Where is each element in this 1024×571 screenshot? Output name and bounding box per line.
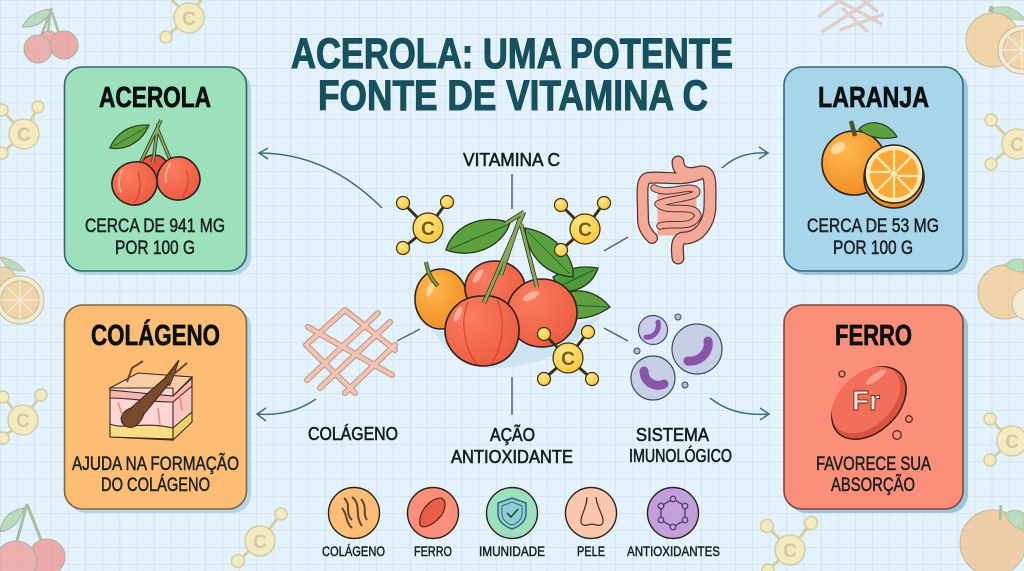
panel: acerola <box>64 67 251 275</box>
icon: acerola cherries <box>110 120 200 205</box>
text: acerola amount <box>85 216 225 259</box>
text: colágeno description: AJUDA NA FORMAÇÃO <box>72 453 239 475</box>
central illustration: acerolas <box>415 212 610 368</box>
label: ação antioxidante: AÇÃO <box>490 424 535 445</box>
orange fruit <box>415 269 467 329</box>
faded cherries top left <box>22 8 78 63</box>
arrow: to acerola <box>259 148 382 208</box>
icon: molecule bottom <box>538 326 598 386</box>
icon: molecule left: C <box>421 219 435 240</box>
faded molecule right <box>985 114 1024 170</box>
legend: pele <box>566 488 616 559</box>
icon: immune cells <box>631 314 722 400</box>
heading: colágeno: COLÁGENO <box>91 318 220 352</box>
panel: laranja <box>784 67 968 275</box>
right fruit <box>507 279 577 347</box>
leaves <box>446 219 610 319</box>
title: ACEROLA: UMA POTENTE <box>291 30 733 78</box>
legend: ferro: FERRO <box>414 543 452 559</box>
faded orange bottom right <box>960 505 1024 571</box>
faded molecule left <box>0 101 44 159</box>
text: colágeno description <box>72 453 239 496</box>
faded molecule left lower <box>0 389 47 444</box>
panel: ferro <box>784 305 968 513</box>
legend: colágeno <box>322 488 385 559</box>
icon: intestine <box>642 162 710 258</box>
icon: molecule left <box>396 196 454 254</box>
arrow: to ferro <box>710 398 769 420</box>
text: laranja amount <box>807 216 939 259</box>
icon: molecule bottom: C <box>561 349 575 370</box>
legend: imunidade: IMUNIDADE <box>479 543 545 559</box>
label: sistema imunológico <box>629 425 732 466</box>
text: acerola amount: CERCA DE 941 MG <box>85 216 225 237</box>
faded molecule left lower: C <box>16 411 30 432</box>
text: ferro description: ABSORÇÃO <box>831 474 915 496</box>
label: ação antioxidante <box>451 424 573 467</box>
label: ação antioxidante: ANTIOXIDANTE <box>451 447 573 467</box>
faded molecule bottom <box>232 508 287 568</box>
faded molecule top <box>160 0 204 43</box>
text: ferro description <box>816 454 931 496</box>
back fruit <box>465 261 525 315</box>
text: acerola amount: POR 100 G <box>115 238 195 259</box>
right leaf <box>525 228 573 277</box>
faded molecule bottom: C <box>253 532 267 553</box>
faded molecule bottom right <box>760 516 818 571</box>
icon: orange <box>822 121 924 208</box>
faded orange right <box>978 259 1024 320</box>
label: vitamina c: VITAMINA C <box>463 150 560 170</box>
legend: pele: PELE <box>577 543 605 559</box>
faded collagen top right <box>818 0 884 32</box>
faded molecule top: C <box>182 9 196 30</box>
text: laranja amount: CERCA DE 53 MG <box>807 216 939 237</box>
faded molecule right: C <box>1010 135 1024 156</box>
title <box>291 30 733 120</box>
arrow: to colágeno <box>257 399 316 421</box>
faded orange slice left <box>0 257 44 324</box>
faded molecule bottom right: C <box>783 541 797 562</box>
faded orange top right <box>966 6 1024 74</box>
legend: antioxidantes <box>627 488 720 559</box>
label: sistema imunológico: IMUNOLÓGICO <box>629 445 732 466</box>
text: ferro description: FAVORECE SUA <box>816 454 931 475</box>
label: sistema imunológico: SISTEMA <box>636 425 709 445</box>
faded cherries bottom left <box>0 504 65 571</box>
label: colágeno: COLÁGENO <box>308 424 398 444</box>
faded molecule left: C <box>17 125 31 146</box>
heading: ferro: FERRO <box>835 320 912 352</box>
text: laranja amount: POR 100 G <box>833 238 913 259</box>
legend: ferro <box>408 488 458 559</box>
connector lines <box>397 174 628 415</box>
icon: iron blood cell <box>818 352 920 454</box>
title: FONTE DE VITAMINA C <box>318 72 708 120</box>
icon: molecule right <box>554 196 610 256</box>
legend: antioxidantes: ANTIOXIDANTES <box>627 543 720 559</box>
panel: colágeno <box>64 305 251 513</box>
text: colágeno description: DO COLÁGENO <box>101 475 210 496</box>
stems <box>484 212 537 303</box>
legend: imunidade <box>479 488 545 559</box>
faded molecule right lower <box>984 413 1024 466</box>
legend row <box>322 488 720 559</box>
icon: iron blood cell: Fr <box>852 385 880 416</box>
arrow: to laranja <box>722 147 768 168</box>
heading: laranja: LARANJA <box>818 82 929 114</box>
icon: collagen mesh <box>306 310 395 393</box>
heading: acerola: ACEROLA <box>99 82 211 114</box>
faded molecule right lower: C <box>1005 432 1019 453</box>
icon: molecule right: C <box>578 220 592 241</box>
legend: colágeno: COLÁGENO <box>322 543 385 559</box>
icon: skin section <box>110 360 192 440</box>
front fruit <box>445 296 519 366</box>
